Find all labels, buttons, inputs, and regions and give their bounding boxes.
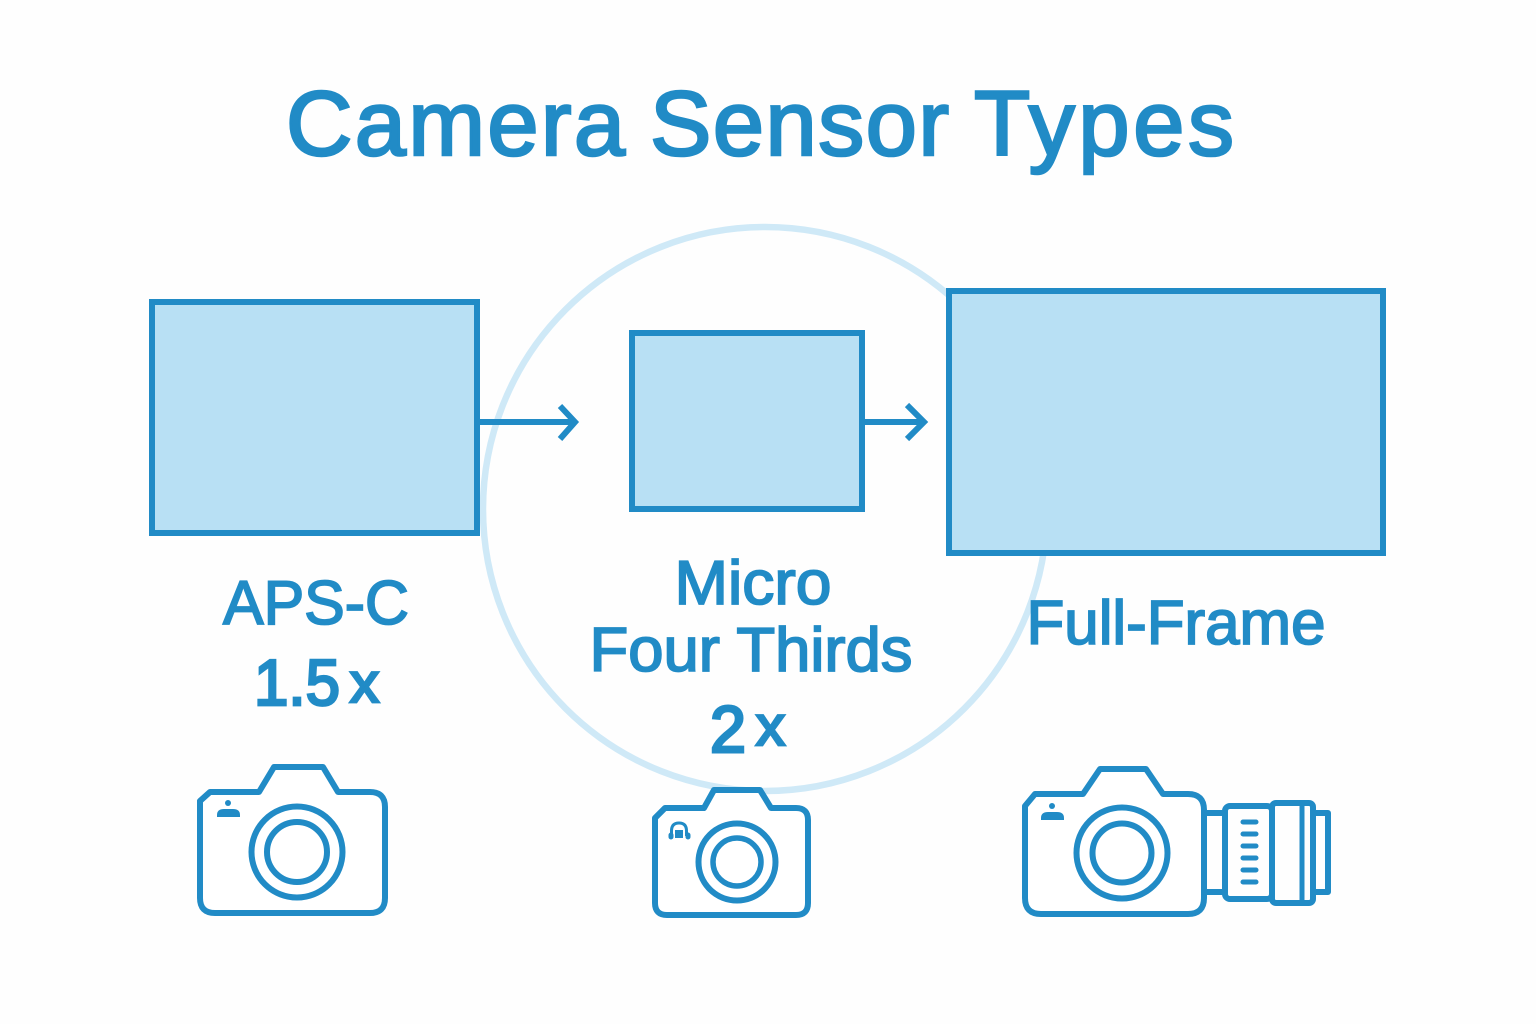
title: Camera	[286, 73, 626, 175]
background circle	[483, 227, 1047, 791]
sensor: Full-Frame	[949, 291, 1383, 553]
arrow: Micro Four Thirds to Full-Frame	[865, 405, 924, 439]
label: APS-C: APS-C	[223, 569, 409, 638]
title	[286, 73, 1234, 175]
label: Full-Frame: Full-Frame	[1026, 589, 1326, 658]
label: Micro Four Thirds: Four Thirds	[590, 616, 912, 685]
label: Micro Four Thirds: Micro	[674, 549, 832, 618]
sensor: APS-C	[152, 302, 477, 533]
crop factor: 2x: x	[756, 694, 785, 757]
crop factor: 1.5x: x	[350, 651, 379, 714]
title: Types	[974, 73, 1234, 175]
icon: APS-C camera	[200, 767, 385, 913]
sensor: Micro Four Thirds	[632, 333, 862, 509]
icon: Micro Four Thirds camera	[655, 790, 808, 915]
label: Micro Four Thirds	[590, 549, 912, 685]
icon: Full-Frame camera with lens	[1025, 769, 1328, 914]
title: Sensor	[650, 73, 949, 175]
crop factor: 2x: 2	[710, 692, 746, 766]
crop factor: 1.5x: 1.5	[254, 646, 340, 719]
crop factor: 2x	[710, 692, 785, 766]
arrow: APS-C to Micro Four Thirds	[479, 406, 575, 439]
